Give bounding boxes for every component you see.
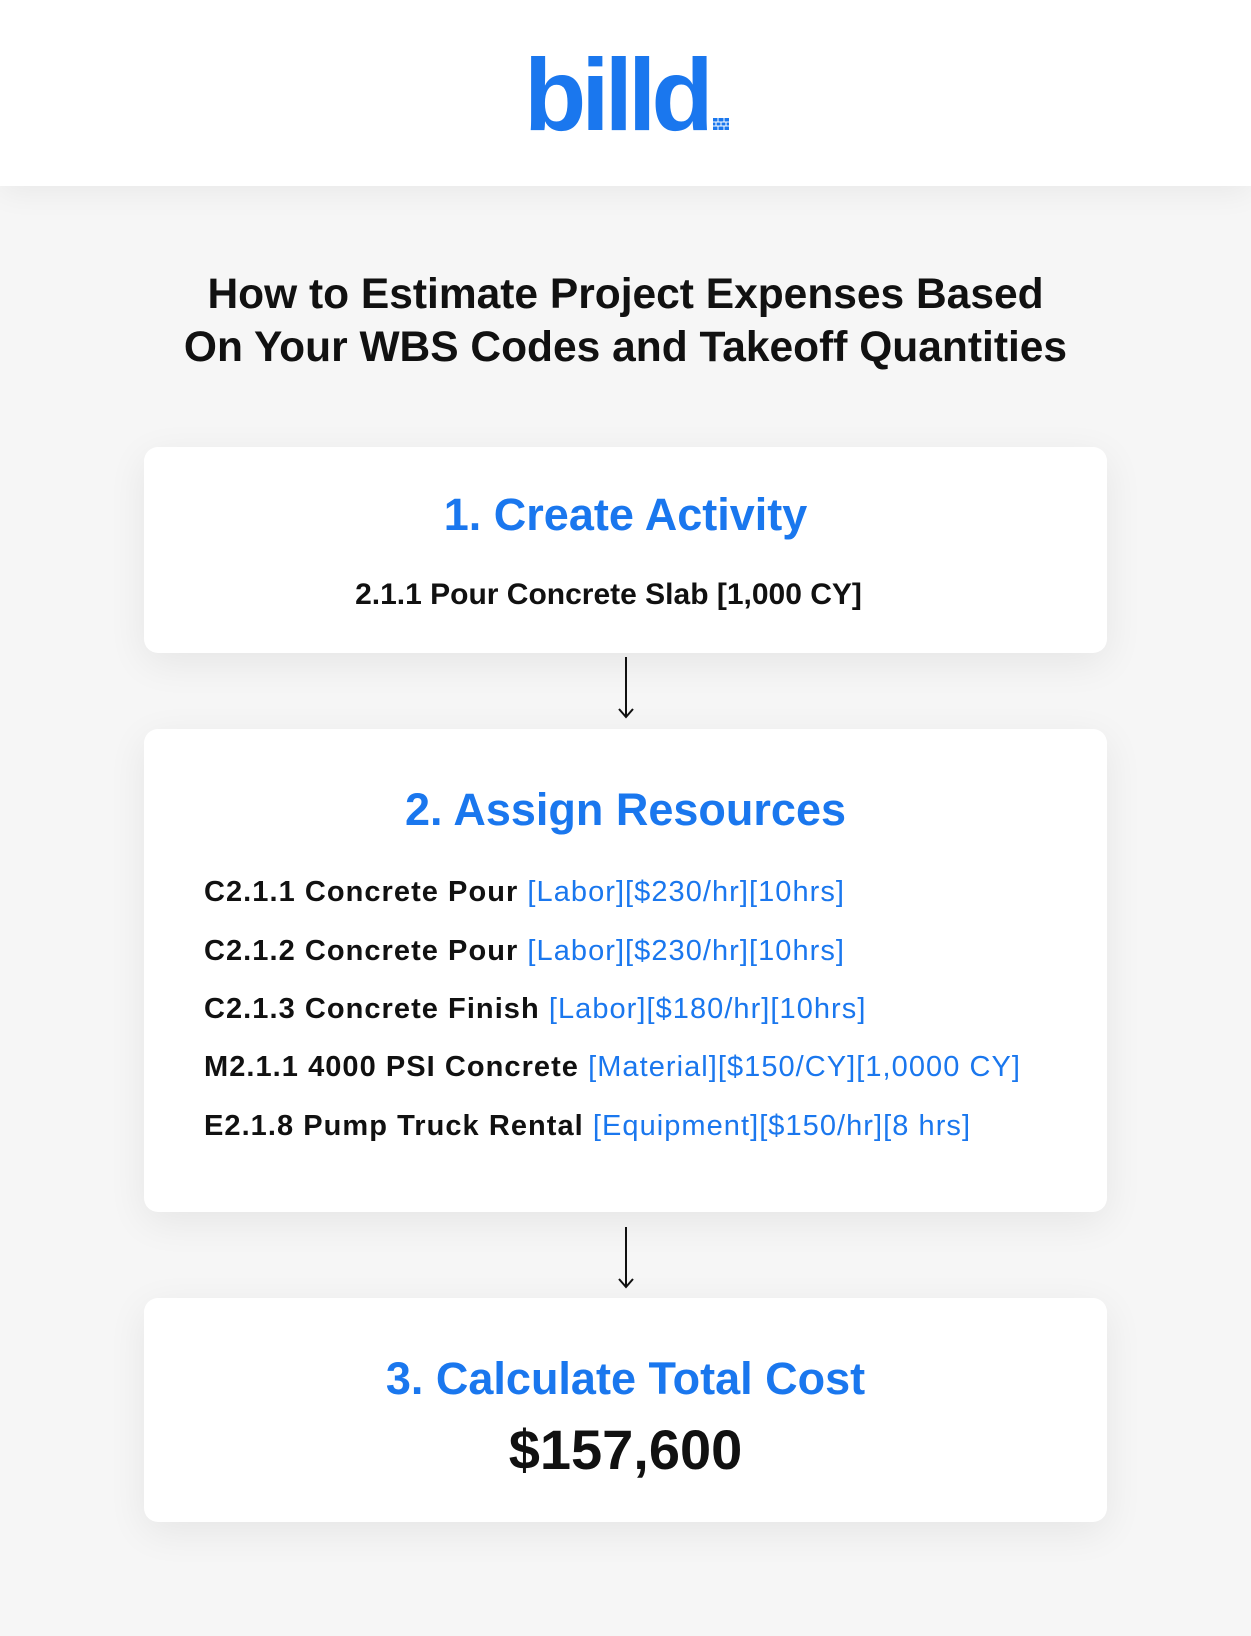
panel: assign resources	[144, 729, 1107, 1212]
activity text: 2.1.1 Pour Concrete Slab [1,000 CY]	[355, 578, 862, 611]
resource list: C2.1.2 Concrete Pour [Labor][$230/hr][10hrs]	[204, 935, 845, 967]
arrow 2	[618, 1227, 634, 1288]
heading 2: 2. Assign Resources	[405, 784, 846, 835]
resource list: E2.1.8 Pump Truck Rental [Equipment][$150/hr][8 hrs]	[204, 1110, 971, 1142]
resource list: C2.1.3 Concrete Finish [Labor][$180/hr][10hrs]	[204, 993, 866, 1025]
panel: create activity	[144, 447, 1107, 653]
heading 3: 3. Calculate Total Cost	[386, 1353, 865, 1404]
title	[184, 271, 1067, 371]
arrow 1	[618, 657, 634, 718]
logo: billd	[524, 38, 709, 152]
heading 1: 1. Create Activity	[444, 489, 807, 540]
resource list: M2.1.1 4000 PSI Concrete [Material][$150/CY][1,0000 CY]	[204, 1051, 1021, 1083]
total value: $157,600	[509, 1418, 742, 1481]
title: On Your WBS Codes and Takeoff Quantities	[184, 324, 1067, 371]
resource list	[204, 876, 1021, 1142]
panel: total cost	[144, 1298, 1107, 1522]
header	[0, 0, 1251, 186]
title: How to Estimate Project Expenses Based	[207, 271, 1044, 318]
resource list: C2.1.1 Concrete Pour [Labor][$230/hr][10hrs]	[204, 876, 845, 908]
